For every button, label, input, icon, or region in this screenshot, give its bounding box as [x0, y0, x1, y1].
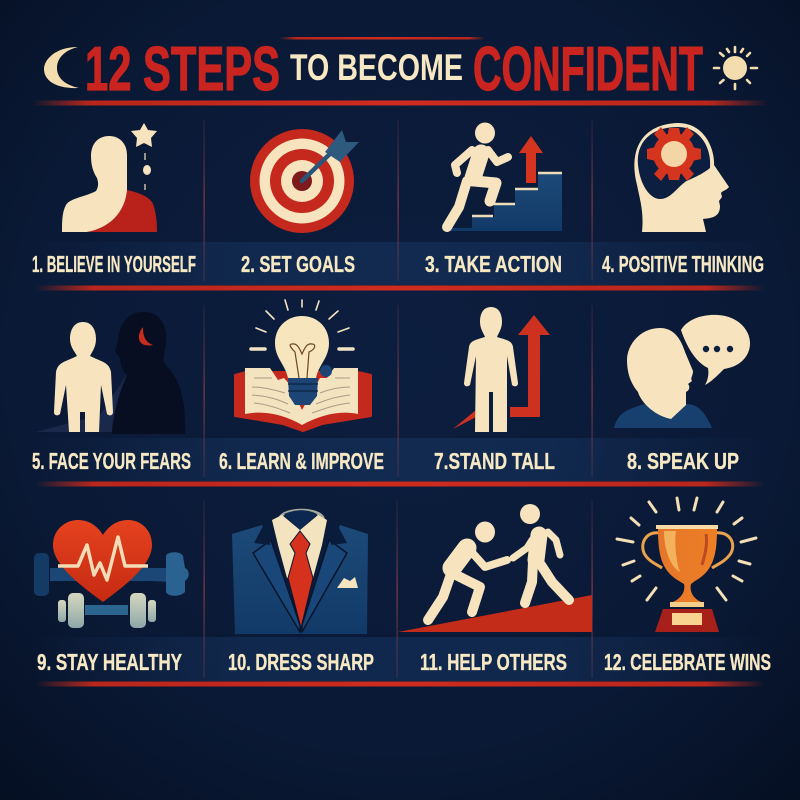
panel 9: stay healthy	[34, 520, 189, 675]
panel 1: believe in yourself	[32, 123, 196, 277]
icon: ramp and two people helping	[398, 504, 592, 632]
panel 2: set goals	[241, 129, 359, 277]
icon: moon	[44, 47, 79, 88]
icon: head with speech bubble	[614, 315, 750, 428]
title: 12 steps: 12 STEPS	[85, 35, 280, 104]
icon: heart with dumbbells	[34, 520, 189, 628]
label 8: 8. SPEAK UP	[627, 448, 739, 474]
title	[44, 35, 757, 104]
panel 3: take action	[425, 122, 562, 277]
label 7: 7.STAND TALL	[434, 448, 555, 474]
icon: sun	[714, 47, 757, 89]
panel 4: positive thinking	[602, 123, 764, 277]
panel 5: face your fears	[32, 312, 191, 474]
label 3: 3. TAKE ACTION	[425, 251, 562, 277]
icon: person with star	[62, 123, 157, 232]
dividers	[32, 37, 768, 686]
title: to become: TO BECOME	[290, 47, 463, 88]
label 10: 10. DRESS SHARP	[228, 649, 374, 675]
panel 11: help others	[398, 504, 592, 675]
label 9: 9. STAY HEALTHY	[37, 649, 182, 675]
icon: standing person with rising arrow	[453, 307, 550, 432]
panel 8: speak up	[614, 315, 750, 474]
panel 12: celebrate wins	[604, 498, 771, 675]
icon: light bulb and open book	[235, 300, 371, 431]
panel 6: learn & improve	[219, 300, 384, 474]
icon: trophy with rays	[617, 498, 756, 632]
label 6: 6. LEARN & IMPROVE	[219, 448, 384, 474]
icon: person and dark shadow	[36, 312, 185, 434]
label 1: 1. BELIEVE IN YOURSELF	[32, 251, 196, 277]
panel 10: dress sharp	[228, 509, 374, 675]
label 2: 2. SET GOALS	[241, 251, 355, 277]
label 11: 11. HELP OTHERS	[420, 649, 567, 675]
icon: person climbing stairs	[447, 122, 562, 231]
label 5: 5. FACE YOUR FEARS	[32, 448, 191, 474]
icon: target with arrow	[250, 129, 359, 233]
icon: head with gear	[634, 123, 729, 232]
icon: suit and tie	[232, 509, 368, 634]
panel 7: stand tall	[434, 307, 555, 474]
label bands	[30, 242, 770, 681]
